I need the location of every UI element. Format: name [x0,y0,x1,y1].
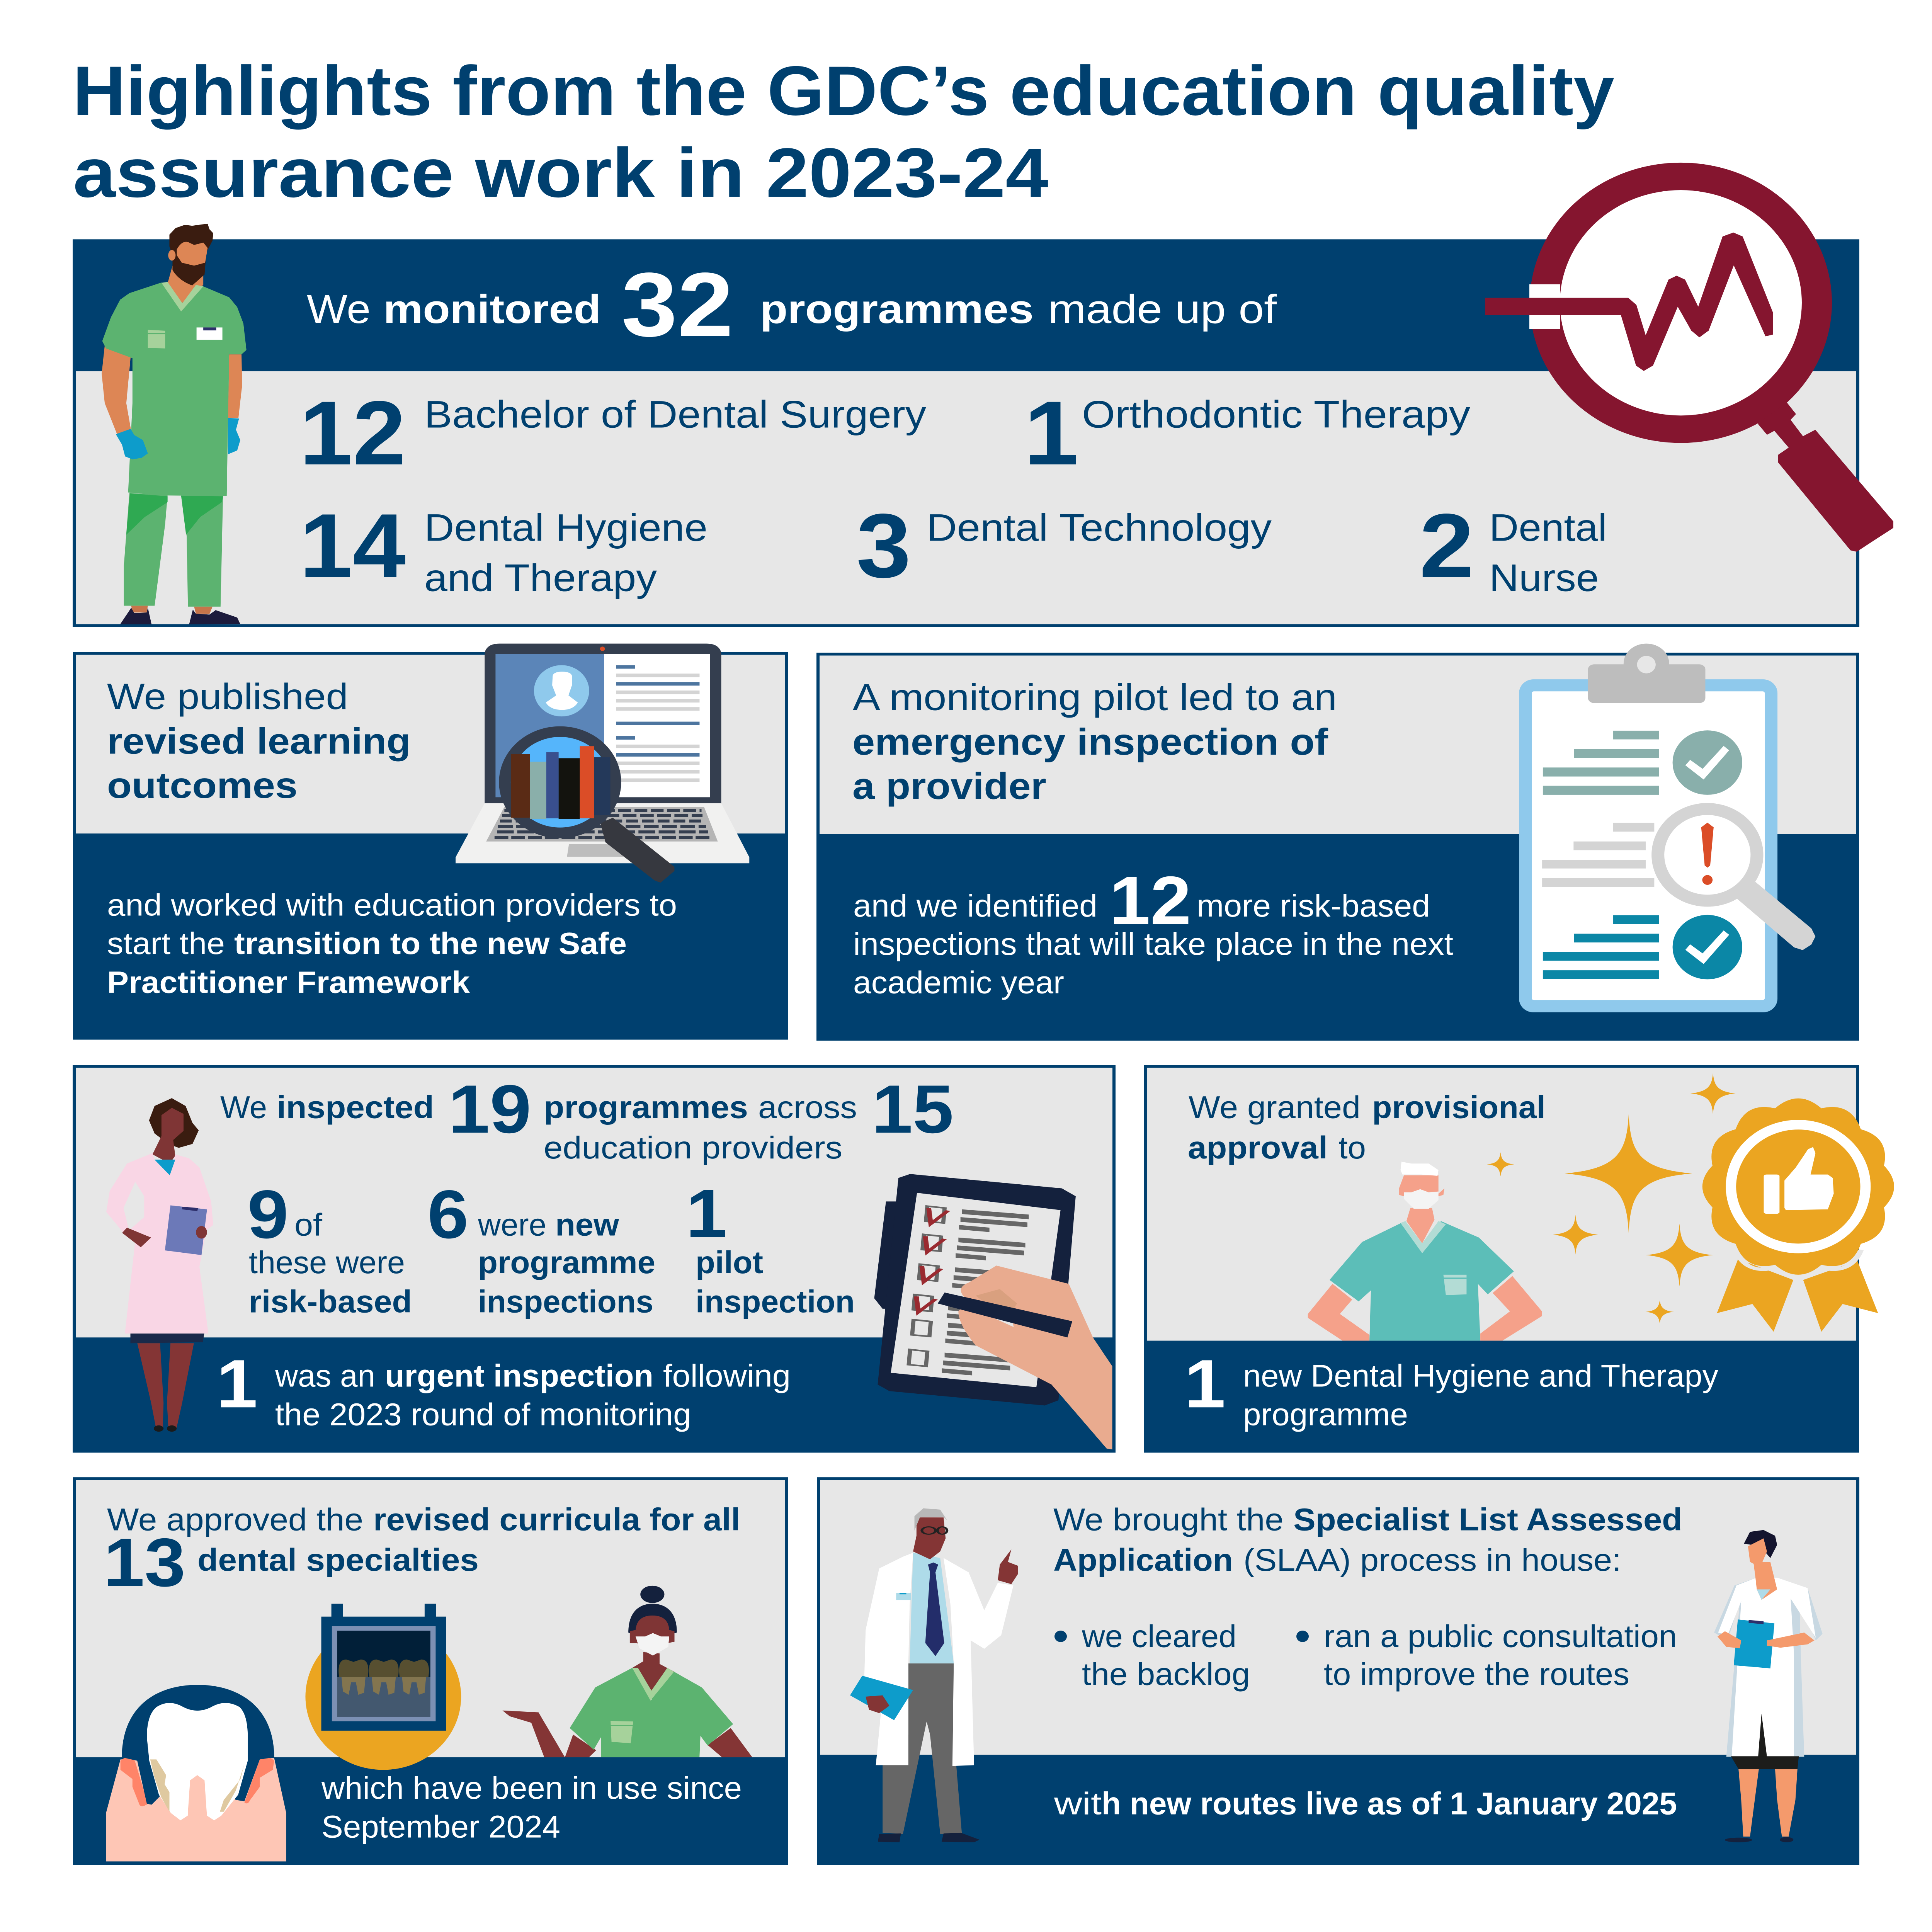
text: we granted provisional approval to: provisional [1372,1090,1546,1125]
stat: 14 Dental Hygiene and Therapy [299,495,707,600]
stat: 1 urgent inspection: following [663,1358,791,1393]
icon: laptop with magnifying glass [456,644,749,883]
bullet: ran a public consultation [1296,1619,1677,1692]
stat: 14 Dental Hygiene and Therapy: and Therapy [424,556,657,600]
heading: we monitored 32 programmes [307,254,1277,355]
text: transition to safe practitioner framework: transition to the new Safe [234,926,627,961]
stat: 1 urgent inspection: urgent inspection [385,1358,653,1393]
bullet: we cleared the backlog: we cleared [1082,1619,1236,1654]
stat: 1 new dental hygiene and therapy programme [1184,1346,1719,1432]
icon: male doctor pointing [850,1508,1018,1842]
text: we published revised learning outcomes [107,676,411,806]
stat: 3 Dental Technology: 3 [856,495,911,596]
text: we granted provisional approval to: approval [1188,1130,1328,1165]
panel: inspected programmes [73,1065,1116,1452]
stat: 1 new dental hygiene and therapy programme: 1 [1184,1346,1226,1422]
heading: we monitored 32 programmes: programmes [760,287,1034,332]
stat: 1 pilot inspection: inspection [696,1284,855,1319]
bullet: we cleared the backlog [1054,1619,1250,1692]
text: we granted provisional approval to: We granted [1189,1090,1361,1125]
text: we published revised learning outcomes: outcomes [107,765,298,806]
text: we inspected 19 programmes across 15 providers: programmes [544,1090,748,1125]
heading: we monitored 32 programmes: monitored [383,287,601,332]
title: Highlights from the GDC’s education quality [73,51,1614,130]
text: 12 more risk-based inspections: 12 [1109,862,1191,939]
text: 12 more risk-based inspections: inspections that will take place in the next [853,926,1453,961]
icon: female doctor with clipboard [1714,1530,1823,1842]
stat: 12 Bachelor of Dental Surgery: Bachelor of Dental Surgery [424,393,926,436]
stat: 6 new programme inspections: were [478,1207,546,1242]
stat: 9 risk-based: 9 [247,1177,289,1253]
text: monitoring pilot and emergency inspection: emergency inspection of [852,721,1328,763]
text: we inspected 19 programmes across 15 providers: education providers [544,1130,842,1165]
stat: 1 Orthodontic Therapy: Orthodontic Therapy [1082,393,1470,436]
stat: 14 Dental Hygiene and Therapy: Dental Hygiene [424,506,707,549]
stat: 1 pilot inspection: 1 [686,1176,727,1252]
text: we published revised learning outcomes: revised learning [107,721,411,762]
stat: 6 new programme inspections: 6 [427,1177,469,1253]
panel: revised curricula [73,1477,788,1865]
text: we approved the revised curricula: dental specialties [197,1542,479,1577]
icon: clipboard with magnifier [1519,644,1815,1012]
stat: 1 pilot inspection [686,1176,855,1319]
stat: 1 pilot inspection: pilot [696,1245,763,1280]
stat: 2 Dental Nurse: 2 [1419,495,1474,596]
text: new routes live as of 1 january 2025: wit [1054,1786,1102,1821]
text: 12 more risk-based inspections: academic year [853,965,1064,1000]
stat: 14 Dental Hygiene and Therapy: 14 [299,495,406,596]
text: transition to safe practitioner framework [107,888,677,1000]
stat: 1 urgent inspection: was an [275,1358,375,1393]
stat: 12 Bachelor of Dental Surgery: 12 [299,382,406,484]
text: in use since september 2024 [321,1770,742,1844]
icon: tablet checklist with hand [874,1174,1112,1449]
icon: tooth in gum [106,1685,286,1861]
stat: 6 new programme inspections [427,1177,655,1319]
stat: 12 Bachelor of Dental Surgery [299,382,926,484]
text: we approved the revised curricula [104,1502,740,1601]
text: monitoring pilot and emergency inspection: a provider [852,765,1046,807]
text: we approved the revised curricula: revised curricula for all [373,1502,740,1537]
panel: specialist list assessed application [817,1477,1859,1865]
heading: we monitored 32 programmes: 32 [621,254,733,355]
text: we inspected 19 programmes across 15 providers: 19 [448,1071,531,1148]
stat: 6 new programme inspections: programme [478,1245,655,1280]
text: we approved the revised curricula: 13 [104,1524,185,1601]
stat: 1 urgent inspection [216,1346,791,1432]
stat: 1 Orthodontic Therapy [1024,382,1470,484]
stat: 3 Dental Technology [856,495,1272,596]
stat: 6 new programme inspections: new [555,1207,619,1242]
text: transition to safe practitioner framework: Practitioner Framework [107,965,470,1000]
panel: revised learning outcomes [73,644,788,1040]
text: 12 more risk-based inspections [853,862,1453,1000]
stat: 1 Orthodontic Therapy: 1 [1024,382,1079,484]
stat: 9 risk-based: risk-based [249,1284,412,1319]
text: monitoring pilot and emergency inspection [852,677,1337,807]
bullet: we cleared the backlog: the backlog [1082,1656,1250,1692]
stat: 1 urgent inspection: the 2023 round of monitoring [275,1397,691,1432]
stat: 1 new dental hygiene and therapy programme: new Dental Hygiene and Therapy [1243,1358,1719,1393]
icon: man in green scrubs [102,224,247,624]
text: we inspected 19 programmes across 15 providers: across [758,1090,857,1125]
icon: doctor in teal scrubs [1308,1162,1542,1341]
text: we inspected 19 programmes across 15 providers: 15 [872,1071,954,1148]
stat: 2 Dental Nurse: Dental [1489,506,1607,549]
text: we granted provisional approval to [1188,1090,1546,1165]
panel: monitored programmes [73,163,1893,627]
stat: 1 urgent inspection: 1 [216,1346,258,1422]
icon: nurse presenting [502,1586,752,1757]
stat: 2 Dental Nurse [1419,495,1607,600]
text: we published revised learning outcomes: We published [107,676,348,717]
text: we brought the slaa in house: (SLAA) process in house: [1243,1542,1621,1577]
title: assurance work in 2023-24 [73,133,1048,212]
text: 12 more risk-based inspections: and we identified [853,888,1097,923]
stat: 9 risk-based [247,1177,412,1319]
icon: dental x-ray on gold circle [305,1604,461,1770]
text: in use since september 2024: which have been in use since [321,1770,742,1805]
icon: magnifying glass with pulse [1485,163,1893,552]
panel: monitoring pilot [816,644,1859,1041]
icon: award rosette with thumbs up [1702,1099,1894,1332]
text: we inspected 19 programmes across 15 providers [220,1071,954,1165]
heading: we monitored 32 programmes: We [307,287,371,332]
text: new routes live as of 1 january 2025: h new routes live as of 1 January 2025 [1102,1786,1677,1821]
bullet: ran a public consultation: ran a public consultation [1324,1619,1677,1654]
text: we brought the slaa in house [1053,1502,1682,1577]
text: transition to safe practitioner framework: start the [107,926,225,961]
heading: we monitored 32 programmes: made up of [1048,287,1277,332]
panel: provisional approval [1144,1065,1894,1452]
text: we brought the slaa in house: We brought the [1053,1502,1284,1537]
stat: 3 Dental Technology: Dental Technology [927,506,1272,549]
text: we inspected 19 programmes across 15 providers: We [220,1090,267,1125]
stat: 9 risk-based: of [294,1207,322,1242]
text: we brought the slaa in house: Specialist List Assessed [1293,1502,1682,1537]
text: we approved the revised curricula: We approved the [107,1502,363,1537]
title [73,51,1614,212]
text: monitoring pilot and emergency inspection: A monitoring pilot led to an [853,677,1337,718]
stat: 2 Dental Nurse: Nurse [1489,556,1599,600]
icon: gold sparkles [1487,1073,1736,1323]
text: 12 more risk-based inspections: more risk-based [1197,888,1430,923]
stat: 1 new dental hygiene and therapy programme: programme [1243,1397,1408,1432]
bullet: ran a public consultation: to improve the routes [1324,1656,1629,1692]
stat: 6 new programme inspections: inspections [478,1284,653,1319]
stat: 9 risk-based: these were [249,1245,405,1280]
text: we brought the slaa in house: Application [1053,1542,1233,1577]
text: we granted provisional approval to: to [1338,1130,1366,1165]
text: we inspected 19 programmes across 15 providers: inspected [277,1090,434,1125]
text: transition to safe practitioner framework: and worked with education providers to [107,888,677,922]
text: in use since september 2024: September 2024 [321,1809,560,1844]
icon: woman in pink coat [106,1098,213,1432]
